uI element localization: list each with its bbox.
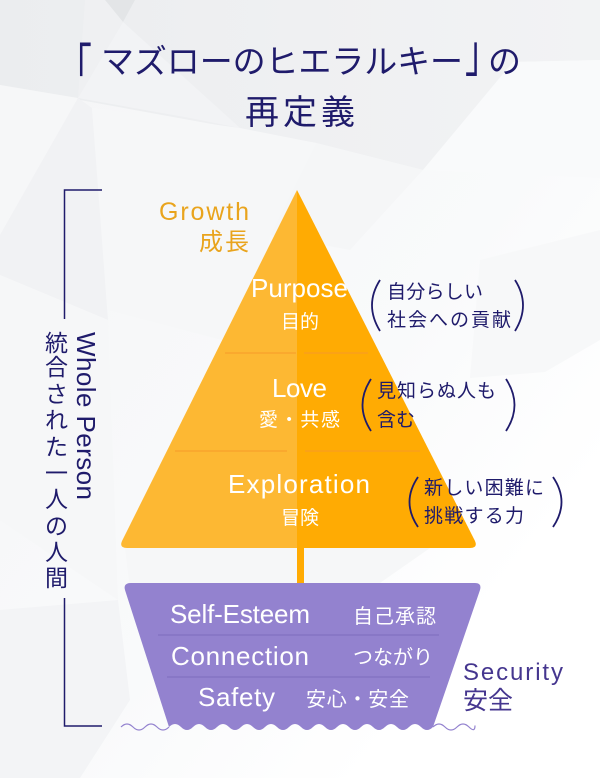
level: love: [259, 373, 340, 432]
level: connection: [171, 641, 433, 671]
label: whole person: 統: [45, 324, 68, 358]
label: growth: 成長: [199, 222, 249, 257]
note: love: 見知らぬ人も: [377, 376, 496, 403]
note: love: [362, 376, 514, 432]
label: whole person: れ: [45, 401, 68, 435]
note: exploration: [410, 473, 562, 528]
title: [58, 11, 521, 134]
label: growth: Growth: [159, 198, 249, 226]
level: exploration: Exploration: [228, 469, 370, 499]
label: whole person: さ: [45, 375, 68, 409]
pyramid: [121, 190, 476, 584]
level: purpose: [251, 273, 348, 334]
level: safety: [198, 682, 409, 712]
level: exploration: [228, 469, 370, 530]
base trapezoid: [121, 583, 480, 730]
level: connection: つながり: [353, 641, 433, 670]
level: connection: Connection: [171, 641, 309, 671]
label: whole person: 合: [45, 348, 68, 382]
level: exploration: 冒険: [281, 503, 319, 530]
label: whole person: た: [45, 428, 68, 462]
label: whole person: 人: [45, 533, 68, 567]
label: whole person: Whole Person: [71, 332, 101, 500]
label: whole person: の: [45, 507, 68, 541]
title: 」: [465, 11, 499, 87]
level: self-esteem: 自己承認: [353, 600, 436, 629]
label: security: Security: [463, 659, 563, 686]
level: safety: 安心・安全: [306, 683, 409, 712]
level: self-esteem: Self-Esteem: [170, 599, 310, 629]
note: exploration: 新しい困難に: [424, 473, 544, 500]
title: 再定義: [245, 85, 355, 134]
level: purpose: Purpose: [251, 273, 348, 303]
label: whole person: 一: [45, 454, 68, 488]
level: self-esteem: [170, 599, 436, 629]
bracket: whole person: [64, 190, 102, 726]
level: purpose: 目的: [281, 307, 319, 334]
note: love: 含む: [377, 405, 415, 432]
note: purpose: 社会への貢献: [387, 305, 511, 332]
label: whole person: 人: [45, 480, 68, 514]
label: whole person: 間: [45, 559, 68, 593]
title: 「: [58, 26, 92, 102]
title: マズローのヒエラルキー: [101, 35, 463, 83]
label: security: [463, 659, 563, 717]
title: の: [488, 35, 521, 83]
pyramid stem: [297, 548, 304, 584]
note: purpose: 自分らしい: [387, 277, 483, 304]
note: exploration: 挑戦する力: [424, 501, 524, 528]
label: growth: [159, 198, 249, 257]
level: love: 愛・共感: [259, 405, 340, 432]
level: safety: Safety: [198, 682, 275, 712]
level: love: Love: [272, 373, 327, 403]
note: purpose: [372, 277, 523, 332]
label: security: 安全: [463, 681, 513, 717]
label: whole person: [45, 324, 101, 593]
